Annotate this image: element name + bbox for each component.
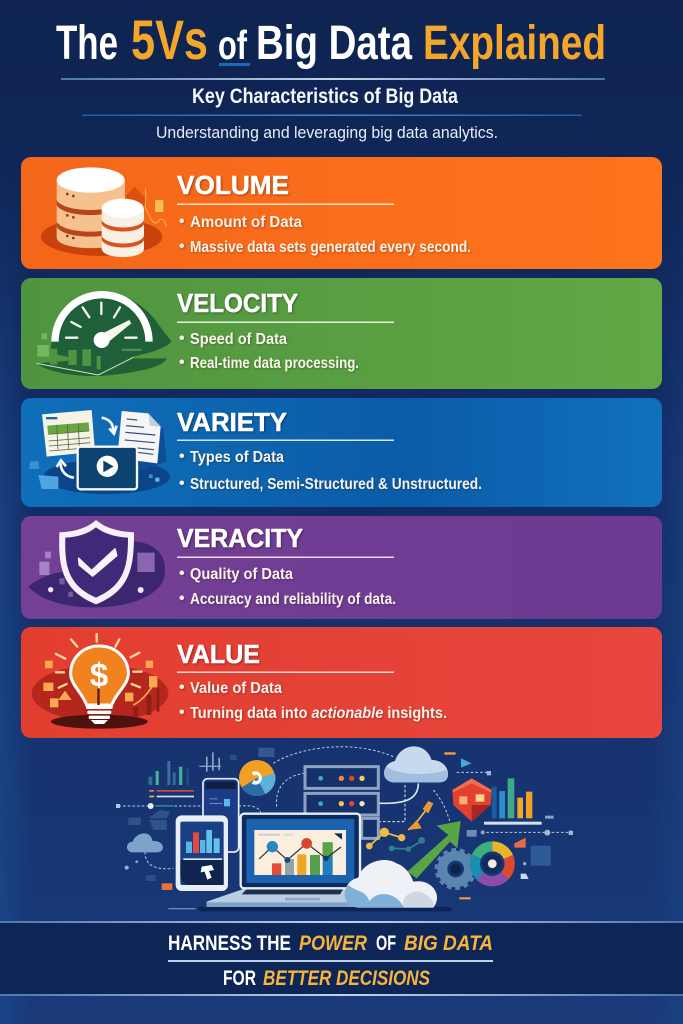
text: velocity bullets: • (179, 330, 185, 347)
text: variety bullets (179, 448, 482, 493)
shadow under laptop (198, 907, 452, 911)
subtitle: Key Characteristics of Big Data (192, 85, 458, 108)
footer text line 1: POWER (299, 932, 368, 955)
icon: shield (28, 520, 165, 607)
icon: speech blocks (128, 810, 170, 825)
icon: green arrow (407, 821, 461, 878)
icon: speedometer (37, 292, 172, 376)
heading: velocity: VELOCITY (177, 288, 298, 318)
text: variety bullets: • (179, 475, 185, 492)
title: Big Data (256, 17, 412, 70)
icon: red shield (452, 778, 492, 822)
icon: server rack (305, 767, 378, 838)
text: velocity bullets: Real-time data processing. (190, 355, 359, 372)
icon: light bulb (32, 634, 168, 729)
icon: pie circle (239, 760, 276, 796)
text: veracity bullets: Accuracy and reliability of data. (190, 591, 396, 608)
panel: variety (21, 398, 662, 507)
footer text line 2: BETTER DECISIONS (263, 967, 430, 990)
heading: volume: VOLUME (177, 170, 289, 200)
panel: volume (21, 157, 662, 269)
footer text line 1: BIG DATA (404, 932, 493, 955)
text: veracity bullets: • (179, 590, 185, 607)
text: variety bullets: Structured, Semi-Structured & Unstructured. (190, 476, 482, 493)
text: velocity bullets: • (179, 354, 185, 371)
icon: phone (203, 779, 239, 852)
heading: variety: VARIETY (177, 407, 287, 437)
icon: tablet (176, 816, 227, 890)
text: volume bullets: • (179, 238, 185, 255)
heading: value: VALUE (177, 639, 260, 669)
text: value bullets: • (179, 704, 185, 721)
icon: yellow node links (366, 801, 433, 852)
icon: laptop (207, 814, 367, 907)
footer text line 1 (168, 932, 493, 955)
tagline: Understanding and leveraging big data analytics. (156, 123, 498, 142)
title (56, 8, 606, 71)
title: 5Vs (131, 8, 208, 71)
title: Explained (423, 17, 606, 70)
footer band (0, 921, 683, 996)
text: variety bullets: Types of Data (190, 449, 284, 466)
icon: data types (29, 410, 170, 494)
title: of (218, 22, 247, 68)
icon: big cloud (345, 860, 437, 908)
icon: gear (436, 850, 475, 888)
text: volume bullets (179, 213, 471, 256)
illustration: technology scene (116, 746, 573, 911)
footer text line 1: HARNESS THE (168, 932, 291, 955)
text: veracity bullets: Quality of Data (190, 566, 293, 583)
footer text line 1: OF (376, 932, 396, 955)
panel: velocity (21, 278, 662, 389)
text: volume bullets: • (179, 213, 185, 230)
panel: value (21, 627, 662, 738)
footer text line 2 (223, 967, 430, 990)
text: value bullets (179, 679, 447, 722)
text: value bullets: Turning data into actionable insights. (190, 705, 447, 722)
footer text line 2: FOR (223, 967, 256, 990)
text: veracity bullets (179, 565, 396, 608)
text: variety bullets: • (179, 448, 185, 465)
panel: veracity (21, 516, 662, 619)
title: The (56, 17, 118, 70)
chart: small bars top left (148, 748, 274, 797)
nodes (459, 771, 573, 899)
icon: small cloud left (127, 833, 163, 852)
icon: database cylinders (41, 167, 167, 257)
text: veracity bullets: • (179, 565, 185, 582)
dashed connectors (118, 747, 572, 869)
chart: bars right (484, 778, 554, 825)
text: value bullets: Value of Data (190, 680, 282, 697)
text: velocity bullets (179, 330, 359, 372)
text: volume bullets: Amount of Data (190, 214, 302, 231)
icon: light bulb: $ (90, 658, 109, 695)
heading: veracity: VERACITY (177, 523, 303, 553)
chart: donut (475, 846, 510, 881)
text: volume bullets: Massive data sets generated every second. (190, 239, 471, 256)
icon: cloud top (379, 746, 472, 803)
text: value bullets: • (179, 679, 185, 696)
text: velocity bullets: Speed of Data (190, 331, 287, 348)
